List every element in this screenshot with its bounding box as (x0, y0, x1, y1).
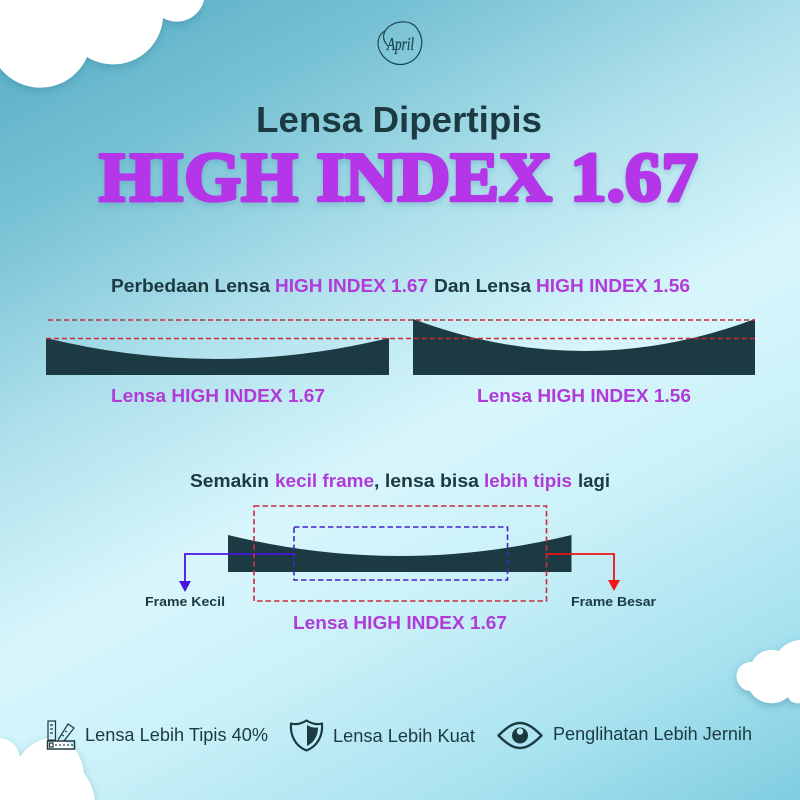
label: diagram lens: Lensa HIGH INDEX 1.67 (293, 613, 507, 633)
label: lens 1.56: Lensa HIGH INDEX 1.56 (477, 386, 691, 406)
heading: lens comparison (111, 276, 690, 296)
heading: frame size: , lensa bisa (374, 471, 480, 491)
dashed thickness guide lines (46, 320, 755, 338)
heading: lens comparison: Dan Lensa (434, 276, 532, 296)
heading: Lensa Dipertipis: Lensa Dipertipis (256, 99, 542, 140)
icon: eye (498, 723, 542, 748)
heading: lens comparison: HIGH INDEX 1.56 (536, 276, 690, 296)
lens shape: frame diagram (228, 535, 572, 572)
icon: shield (291, 720, 322, 750)
heading: frame size: Semakin (190, 471, 269, 491)
cloud: bottom left (0, 738, 95, 800)
dashed frame: kecil (294, 527, 508, 580)
heading: frame size: lebih tipis (484, 471, 572, 491)
icon: rulers (48, 721, 74, 749)
heading: frame size: lagi (578, 471, 610, 491)
text: thinner lens: Lensa Lebih Tipis 40% (85, 725, 268, 745)
logo: April (378, 22, 422, 64)
label: Frame Kecil: Frame Kecil (145, 594, 225, 609)
lens shape: 1.67 (46, 338, 389, 375)
title: HIGH INDEX 1.67: HIGH INDEX 1.67 (99, 140, 698, 216)
label: lens 1.67: Lensa HIGH INDEX 1.67 (111, 386, 325, 406)
text: stronger lens: Lensa Lebih Kuat (333, 726, 475, 746)
heading: lens comparison: HIGH INDEX 1.67 (275, 276, 428, 296)
cloud: right (736, 640, 800, 703)
cloud: top left (0, 0, 204, 88)
arrow: frame kecil (179, 554, 294, 592)
heading: frame size: kecil frame (275, 471, 374, 491)
heading: lens comparison: Perbedaan Lensa (111, 276, 271, 296)
dashed frame: besar (254, 506, 546, 601)
lens shape: 1.56 (413, 319, 755, 375)
heading: frame size (190, 471, 610, 491)
logo: April: April (386, 34, 414, 54)
arrow: frame besar (546, 554, 620, 591)
text: clearer vision: Penglihatan Lebih Jernih (553, 724, 752, 744)
label: Frame Besar: Frame Besar (571, 594, 656, 609)
